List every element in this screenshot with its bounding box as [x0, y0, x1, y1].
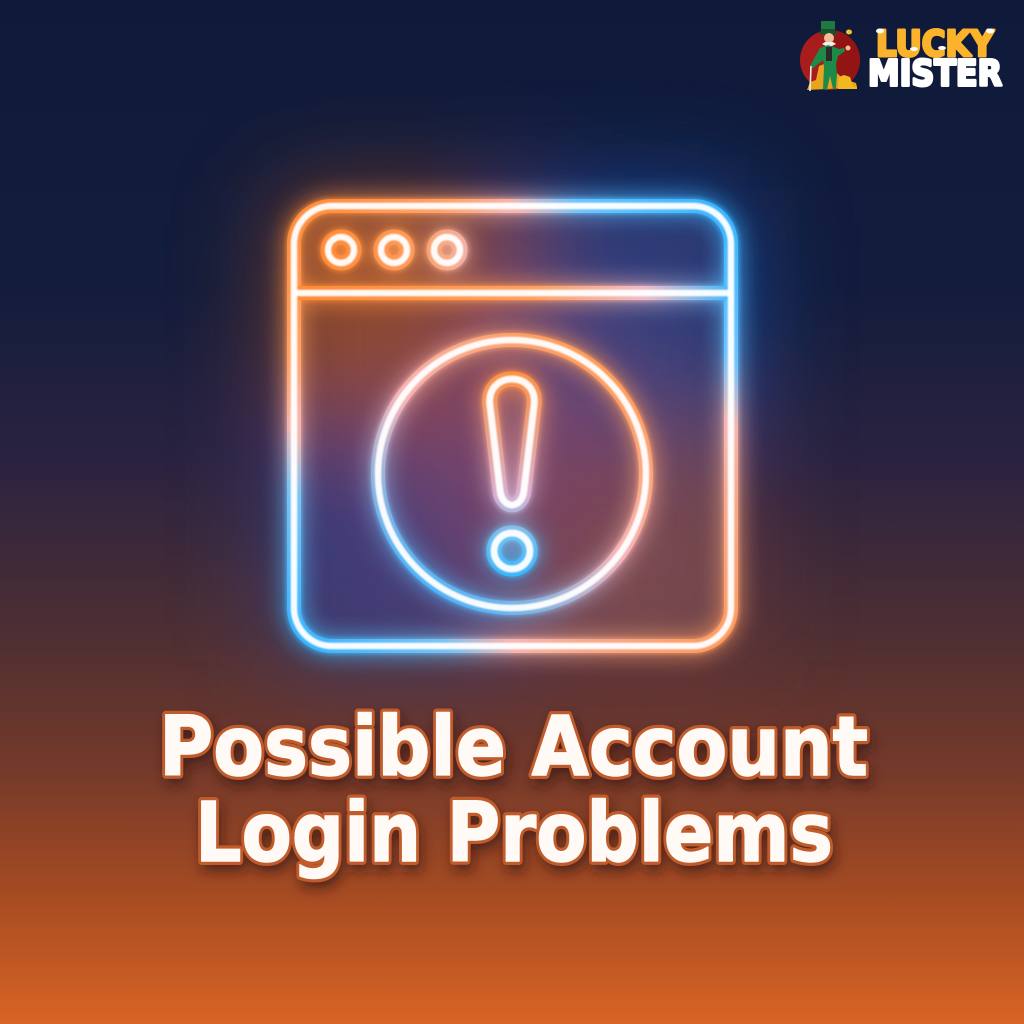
title line 2 fill: Login Problems: [195, 786, 833, 881]
title line 1 outline: Possible Account: [159, 700, 868, 795]
title shadow: [162, 707, 871, 888]
title bar dots: [328, 237, 460, 263]
logo wordmark MISTER: MISTER: [868, 54, 1002, 94]
warning circle: [378, 340, 646, 608]
logo emblem: gentleman on red circle: [800, 21, 860, 91]
title line 2 outline: Login Problems: [195, 786, 833, 881]
title: [159, 700, 871, 888]
logo: Lucky Mister: [800, 21, 1002, 94]
exclamation mark: [490, 379, 534, 569]
title shadow: Possible Account: [162, 707, 871, 802]
window interior tint: [301, 213, 724, 638]
outer glow behind window: [275, 190, 749, 660]
title line 1 fill: Possible Account: [159, 700, 868, 795]
window frame white core: [294, 206, 731, 646]
window frame glow: [294, 206, 731, 646]
logo snow caps: [876, 28, 994, 51]
logo wordmark LUCKY: LUCKY: [876, 24, 995, 65]
title shadow: Login Problems: [198, 793, 836, 888]
neon browser window icon: [294, 206, 731, 646]
